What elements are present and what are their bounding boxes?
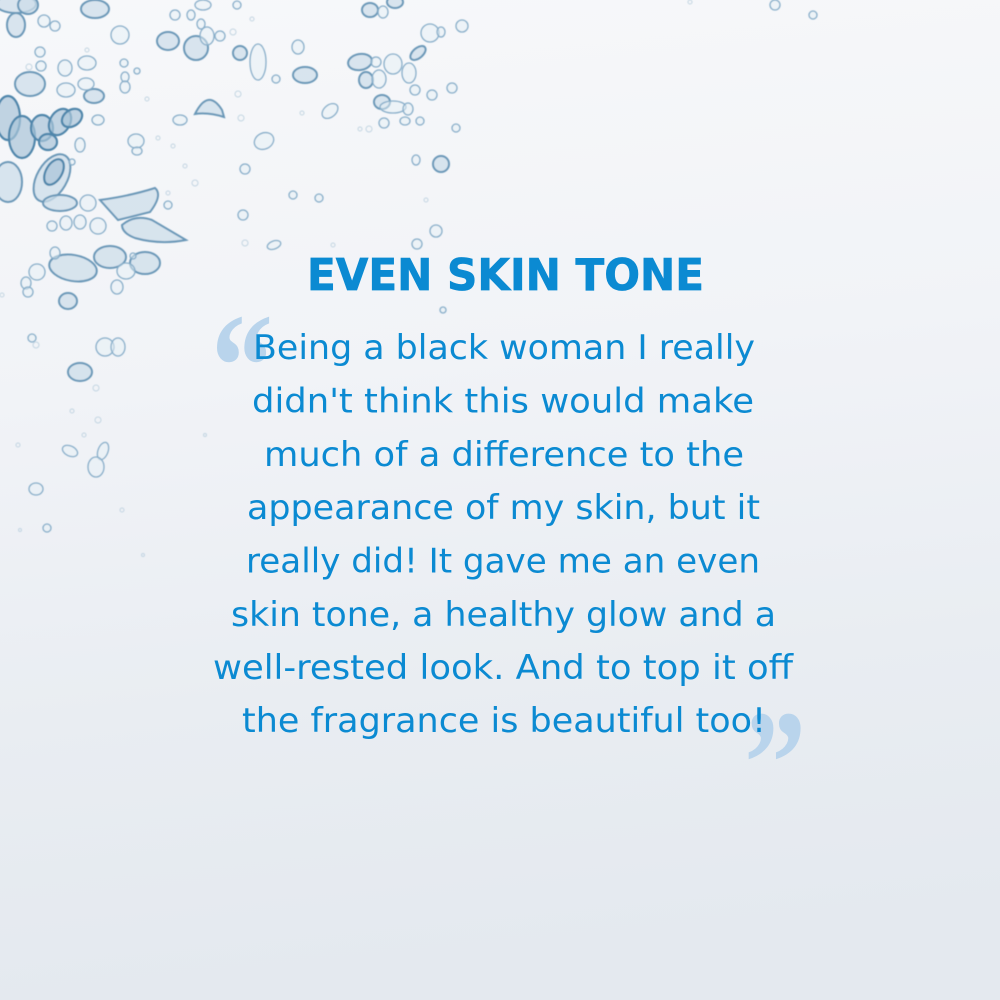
testimonial text: skin tone, a healthy glow and a [231, 595, 776, 635]
faint tiny bubbles [0, 0, 692, 556]
testimonial text [213, 328, 795, 741]
testimonial text: the fragrance is beautiful too! [242, 701, 766, 741]
medium bubbles [21, 0, 817, 532]
testimonial text: appearance of my skin, but it [247, 488, 760, 528]
testimonial text: didn't think this would make [252, 382, 754, 422]
opening quotation mark: “ [211, 283, 273, 450]
water bubbles [0, 0, 817, 556]
testimonial text: well-rested look. And to top it off [213, 648, 795, 688]
testimonial text: really did! It gave me an even [246, 542, 760, 582]
testimonial text: much of a difference to the [264, 435, 744, 475]
testimonial text: Being a black woman I really [253, 328, 755, 368]
large dark bubbles [0, 0, 449, 381]
title: EVEN SKIN TONE [307, 250, 704, 301]
dense bubble cluster [0, 96, 86, 188]
closing quotation mark: ” [744, 680, 806, 847]
